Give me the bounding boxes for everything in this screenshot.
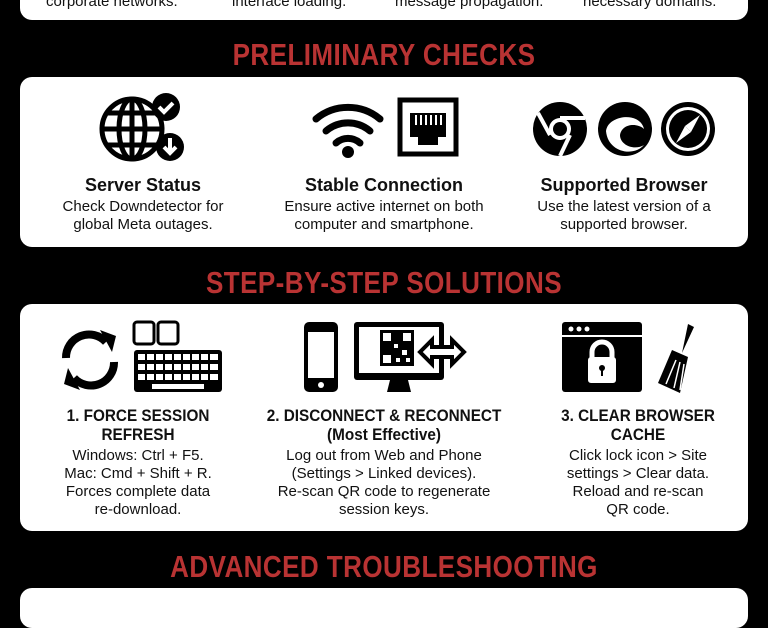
text: step 3: 3. CLEAR BROWSER: [561, 406, 715, 425]
panel: step-by-step solutions: Re-scan QR code to regenerate: [278, 483, 490, 500]
heading: step-by-step: STEP-BY-STEP SOLUTIONS: [206, 265, 562, 300]
icon: wifi and ethernet: [312, 98, 458, 158]
panel: step-by-step solutions: Mac: Cmd + Shift + R.: [64, 465, 212, 482]
panel: preliminary checks: Ensure active internet on both: [284, 198, 484, 215]
text: step 2: (Most Effective): [327, 425, 441, 444]
panel: step-by-step solutions: Windows: Ctrl + F5.: [72, 447, 204, 464]
panel: step-by-step solutions: Reload and re-scan: [573, 483, 703, 500]
text: step 1: 1. FORCE SESSION: [67, 406, 209, 425]
panel: preliminary checks: [20, 77, 748, 247]
panel: step-by-step solutions: [20, 304, 748, 531]
text: step 3: [561, 406, 715, 444]
icon: phone, monitor with QR, arrows: [304, 322, 467, 392]
panel: step-by-step solutions: QR code.: [606, 501, 670, 518]
panel: step-by-step solutions: Log out from Web and Phone: [286, 447, 482, 464]
panel: top (cut off): [20, 0, 748, 20]
text: step 2: 2. DISCONNECT & RECONNECT: [267, 406, 501, 425]
panel: step-by-step solutions: (Settings > Linked devices).: [292, 465, 476, 482]
heading: preliminary checks: PRELIMINARY CHECKS: [233, 37, 535, 72]
panel: step-by-step solutions: re-download.: [95, 501, 181, 518]
text: step 1: REFRESH: [101, 425, 175, 444]
text: step 1: [67, 406, 209, 444]
panel: step-by-step solutions: Click lock icon > Site: [569, 447, 707, 464]
text: top row descriptions: [46, 0, 716, 10]
icon: refresh and keyboard: [62, 320, 222, 392]
panel: preliminary checks: Check Downdetector for: [63, 198, 223, 215]
panel: step-by-step solutions: Forces complete data: [66, 483, 210, 500]
icon: globe with check and download: [100, 93, 184, 162]
text: stable connection: Stable Connection: [305, 175, 463, 195]
icon: browser lock and broom: [562, 322, 694, 393]
text: step 2: [267, 406, 502, 444]
panel: step-by-step solutions: settings > Clear data.: [567, 465, 709, 482]
text: server status: Server Status: [85, 175, 201, 195]
panel: step-by-step solutions: session keys.: [339, 501, 429, 518]
panel: advanced (cut off): [20, 588, 748, 628]
panel: preliminary checks: global Meta outages.: [73, 216, 213, 233]
text: step 3: CACHE: [611, 425, 665, 444]
panel: preliminary checks: supported browser.: [560, 216, 688, 233]
icon: browsers: [533, 102, 715, 156]
heading: advanced troubleshooting: ADVANCED TROUBLESHOOTING: [170, 549, 598, 584]
panel: preliminary checks: computer and smartphone.: [294, 216, 474, 233]
panel: preliminary checks: Use the latest version of a: [537, 198, 711, 215]
text: supported browser: Supported Browser: [540, 175, 708, 195]
